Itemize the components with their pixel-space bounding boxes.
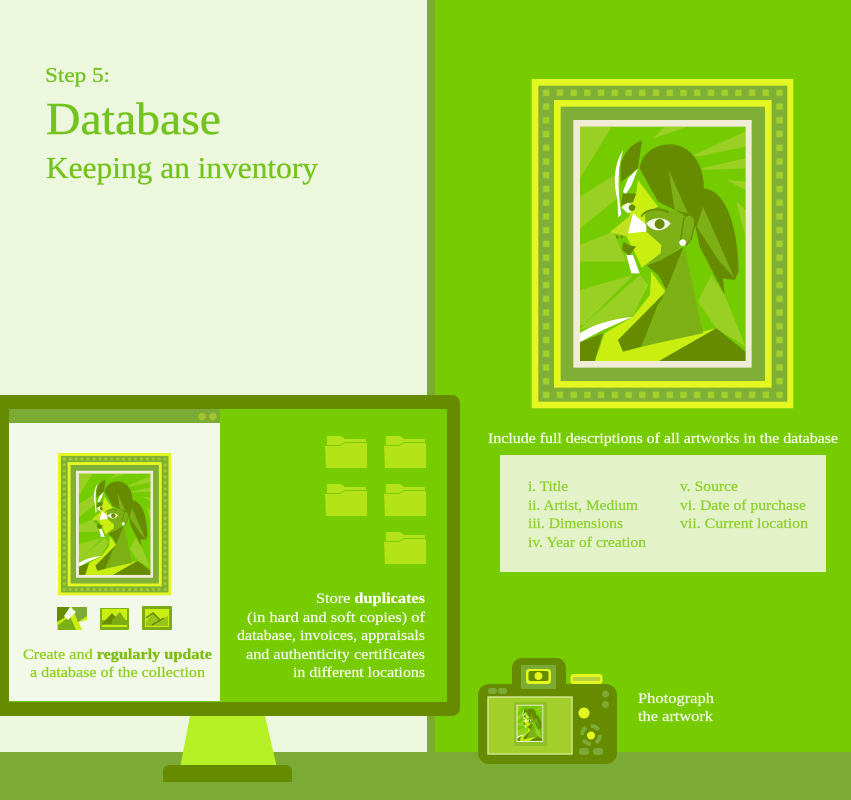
text: store duplicates	[237, 591, 425, 681]
window title bar	[9, 409, 220, 423]
monitor	[0, 395, 460, 716]
monitor: a database of the collection	[30, 665, 206, 681]
screen background	[9, 409, 447, 702]
camera body	[478, 684, 617, 764]
mini painting on camera screen	[514, 702, 547, 746]
panel: right green background	[428, 0, 851, 800]
panel: description list: v. Source	[680, 479, 738, 495]
camera	[478, 658, 617, 764]
camera hump	[512, 658, 566, 698]
title block	[45, 63, 318, 185]
yellow button	[578, 708, 590, 718]
caption: full descriptions: Include full descriptions of all artworks in the database	[488, 431, 838, 447]
panel: description list: iv. Year of creation	[528, 535, 647, 551]
caption: photograph the artwork: the artwork	[638, 709, 714, 725]
panel: description list: i. Title	[528, 479, 568, 495]
text: store duplicates: (in hard and soft copies) of	[247, 610, 425, 626]
small framed portrait	[58, 453, 171, 595]
panel: description list: vi. Date of purchase	[680, 498, 806, 514]
monitor body	[0, 395, 460, 716]
dial control	[582, 726, 600, 744]
framed portrait painting	[532, 79, 793, 408]
window panel	[9, 423, 220, 701]
panel: left light background	[0, 0, 428, 800]
shutter button	[570, 674, 602, 684]
thumbnail: sketch landscape	[142, 606, 172, 630]
subheading: Keeping an inventory	[46, 150, 318, 185]
panel: description list: iii. Dimensions	[528, 516, 623, 532]
step label: Step 5:	[45, 63, 110, 87]
caption: create and update: Create and regularly update	[23, 647, 212, 663]
camera screen	[488, 697, 572, 754]
heading: Database: Database	[46, 93, 221, 144]
small buttons	[488, 688, 497, 694]
floor band	[0, 752, 851, 800]
viewfinder	[521, 665, 556, 689]
text: store duplicates: database, invoices, appraisals	[237, 628, 425, 644]
text: store duplicates: in different locations	[293, 665, 425, 681]
panel: description list: ii. Artist, Medium	[528, 498, 638, 514]
monitor stand	[163, 716, 292, 782]
text: store duplicates: Store duplicates	[316, 591, 425, 607]
folder icons	[325, 436, 426, 564]
panel: description list: vii. Current location	[680, 516, 809, 532]
caption: photograph the artwork	[638, 691, 715, 725]
thumbnail: landscape	[100, 608, 129, 630]
vertical divider band	[427, 0, 435, 752]
lower buttons	[579, 748, 589, 755]
panel: description list	[500, 455, 826, 572]
text: store duplicates: and authenticity certificates	[246, 647, 425, 663]
caption: photograph the artwork: Photograph	[638, 691, 715, 707]
thumbnail: abstract	[57, 607, 87, 630]
